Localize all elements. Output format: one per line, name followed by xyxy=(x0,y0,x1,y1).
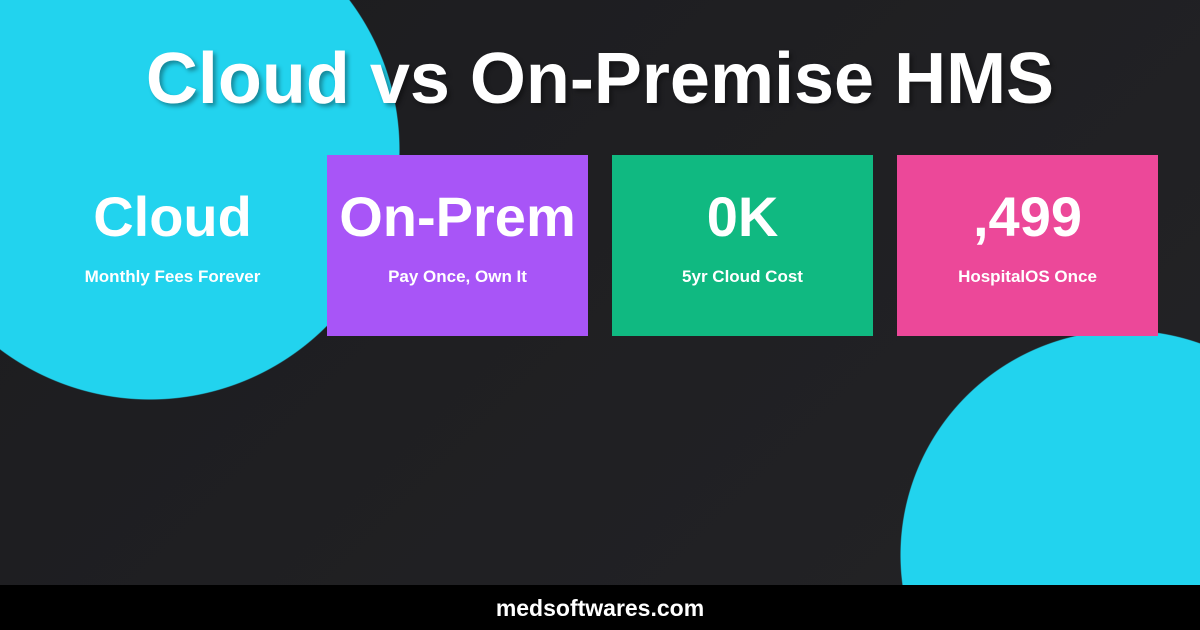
footer: medsoftwares.com xyxy=(496,595,704,621)
footer xyxy=(0,585,1200,630)
card: Cloud xyxy=(42,155,303,336)
card: ,499 xyxy=(897,155,1158,336)
card: On-Prem: On-Prem xyxy=(339,185,576,248)
card: 0K: 0K xyxy=(707,185,778,248)
card: Cloud: Monthly Fees Forever xyxy=(85,267,260,286)
card: Cloud: Cloud xyxy=(93,185,252,248)
card: On-Prem xyxy=(327,155,588,336)
card: 0K xyxy=(612,155,873,336)
card: 0K: 5yr Cloud Cost xyxy=(682,267,803,286)
card: On-Prem: Pay Once, Own It xyxy=(388,267,527,286)
card: ,499: ,499 xyxy=(973,185,1082,248)
card: ,499: HospitalOS Once xyxy=(958,267,1097,286)
title: Cloud vs On-Premise HMS xyxy=(146,39,1054,119)
